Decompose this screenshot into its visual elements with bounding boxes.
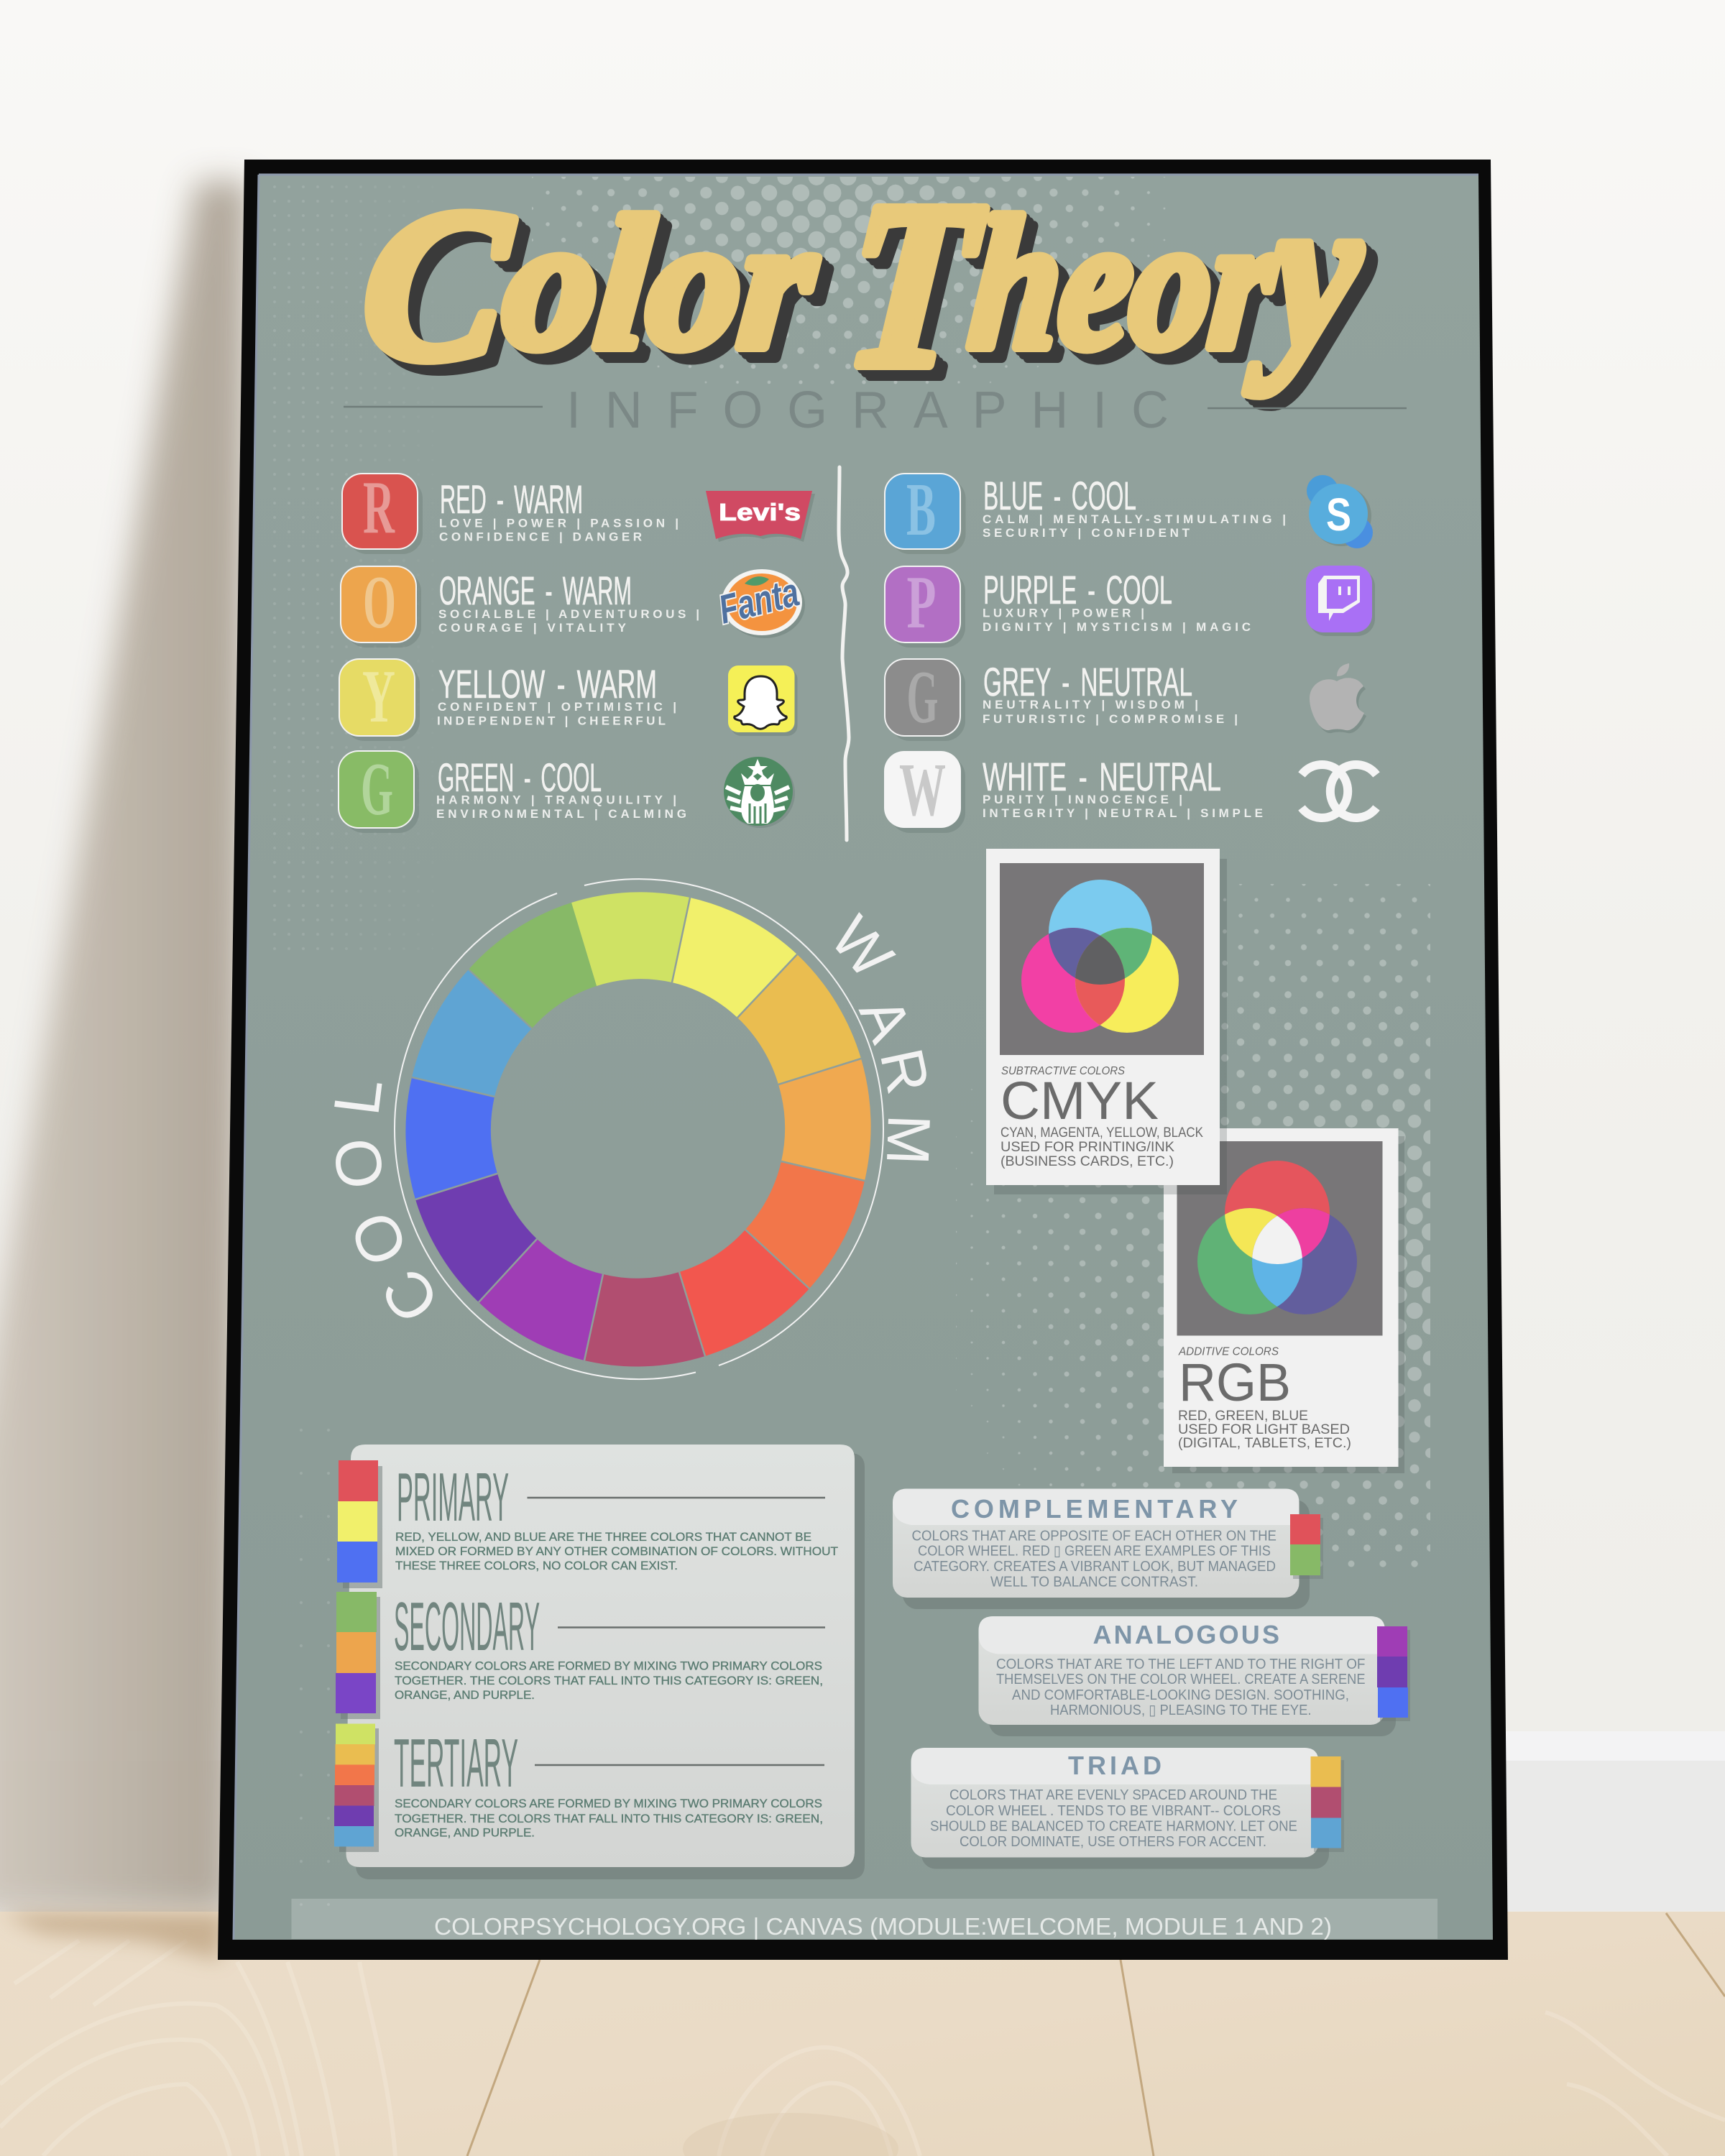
color row: green: G <box>361 747 393 831</box>
baseboard right <box>1502 1731 1725 1911</box>
logo: twitch <box>1306 566 1375 636</box>
logo: levi's <box>706 491 815 542</box>
card: cmyk: (BUSINESS CARDS, ETC.) <box>1000 1154 1174 1169</box>
wedge: blue <box>405 1077 497 1199</box>
color row: white: PURITY | INNOCENCE | <box>983 793 1182 806</box>
text: secondary: ORANGE, AND PURPLE. <box>395 1689 535 1702</box>
color row: orange <box>341 560 699 648</box>
logo: skype: S <box>1326 489 1351 540</box>
color row: green: GREEN - COOL <box>438 755 602 800</box>
color row: purple: DIGNITY | MYSTICISM | MAGIC <box>983 620 1251 634</box>
color row: blue: SECURITY | CONFIDENT <box>983 526 1190 540</box>
card: cmyk: CYAN, MAGENTA, YELLOW, BLACK <box>1000 1125 1203 1141</box>
swatches: tertiary <box>334 1723 379 1852</box>
baseboard left <box>0 1731 230 1912</box>
label: cool: O <box>336 1201 423 1276</box>
color row: grey: G <box>907 655 939 739</box>
color row: grey: GREY - NEUTRAL <box>983 659 1192 704</box>
color row: yellow: INDEPENDENT | CHEERFUL <box>437 714 666 727</box>
logo: snapchat <box>728 665 798 736</box>
wedge: purple <box>479 1239 603 1360</box>
wedge: red-orange <box>745 1161 865 1289</box>
color row: green: HARMONY | TRANQUILITY | <box>436 793 676 806</box>
color row: green: ENVIRONMENTAL | CALMING <box>436 807 686 821</box>
wavy divider <box>839 467 849 840</box>
logo: levi's: Levi's <box>719 499 801 525</box>
panel: triad: SHOULD BE BALANCED TO CREATE HARMONY. LET ONE <box>930 1818 1297 1834</box>
color row: orange: SOCIALBLE | ADVENTUROUS | <box>438 607 699 621</box>
title: y <box>1243 149 1372 395</box>
panel: analogous: THEMSELVES ON THE COLOR WHEEL. CREATE A SERENE <box>996 1672 1366 1687</box>
card: rgb <box>1164 1128 1404 1473</box>
panel: analogous: COLORS THAT ARE TO THE LEFT AND TO THE RIGHT OF <box>996 1657 1366 1672</box>
color row: green <box>339 747 686 833</box>
text: secondary <box>395 1660 823 1702</box>
label: warm <box>818 903 943 1166</box>
color row: purple: P <box>907 560 936 644</box>
color row: purple <box>885 560 1251 648</box>
title: heor <box>963 178 1286 387</box>
wedge: yellow-green <box>571 892 690 986</box>
panel: analogous: ANALOGOUS <box>1092 1620 1279 1649</box>
panel: triad: COLOR WHEEL . TENDS TO BE VIBRANT-- COLORS <box>946 1803 1281 1819</box>
color row: blue: CALM | MENTALLY-STIMULATING | <box>983 512 1286 526</box>
panel: primary secondary tertiary: TERTIARY <box>394 1725 518 1802</box>
label: warm: W <box>818 903 906 990</box>
wedge: red <box>679 1230 809 1356</box>
color row: white: WHITE - NEUTRAL <box>983 754 1221 799</box>
text: tertiary: TOGETHER. THE COLORS THAT FALL INTO THIS CATEGORY IS: GREEN, <box>395 1812 823 1825</box>
card: rgb: USED FOR LIGHT BASED <box>1178 1422 1350 1437</box>
color row: red: RED - WARM <box>440 476 583 522</box>
label: cool: L <box>321 1074 397 1119</box>
color row: yellow: YELLOW - WARM <box>438 661 657 706</box>
color row: red: LOVE | POWER | PASSION | <box>439 516 678 530</box>
label: warm: A <box>847 987 924 1051</box>
logo: chanel <box>1302 765 1376 818</box>
text: primary: THESE THREE COLORS, NO COLOR CAN EXIST. <box>395 1560 678 1572</box>
color row: blue: B <box>906 467 936 551</box>
color row: white <box>884 747 1263 833</box>
swatches: primary <box>337 1460 382 1588</box>
text: primary: MIXED OR FORMED BY ANY OTHER COMBINATION OF COLORS. WITHOUT <box>395 1545 838 1558</box>
subtitle: infographic: INFOGRAPHIC <box>566 382 1169 439</box>
logo: fanta <box>714 568 805 638</box>
color row: yellow <box>339 654 676 741</box>
wedge: green <box>469 903 597 1028</box>
color row: grey: FUTURISTIC | COMPROMISE | <box>983 712 1238 726</box>
panel: complementary <box>893 1489 1323 1609</box>
panel: primary secondary tertiary <box>334 1445 865 1879</box>
panel: complementary: WELL TO BALANCE CONTRAST. <box>990 1574 1198 1590</box>
swatches: complementary <box>1290 1514 1323 1579</box>
title <box>354 149 1372 416</box>
color row: purple: LUXURY | POWER | <box>983 607 1144 619</box>
wedge: magenta-red <box>584 1272 705 1366</box>
color row: blue <box>885 467 1286 554</box>
color row: blue: BLUE - COOL <box>983 473 1136 518</box>
color row: white: INTEGRITY | NEUTRAL | SIMPLE <box>983 806 1263 820</box>
text: tertiary: SECONDARY COLORS ARE FORMED BY MIXING TWO PRIMARY COLORS <box>395 1797 822 1810</box>
card: cmyk: SUBTRACTIVE COLORS <box>1001 1065 1125 1077</box>
color row: white: W <box>899 747 946 831</box>
wedge: orange <box>778 1059 871 1181</box>
wall shadow <box>0 181 248 1912</box>
card: cmyk: CMYK <box>1000 1071 1159 1130</box>
text: tertiary <box>395 1797 823 1840</box>
panel: analogous: HARMONIOUS, ▯ PLEASING TO THE EYE. <box>1050 1703 1311 1718</box>
text: primary <box>395 1531 838 1572</box>
footer band: COLORPSYCHOLOGY.ORG | CANVAS (MODULE:WELCOME, MODULE 1 AND 2) <box>434 1913 1332 1940</box>
swatches: analogous <box>1377 1626 1410 1721</box>
color row: grey: NEUTRALITY | WISDOM | <box>983 698 1198 711</box>
poster background <box>234 175 1493 1940</box>
card: rgb: (DIGITAL, TABLETS, ETC.) <box>1178 1436 1351 1451</box>
color row: yellow: Y <box>362 654 395 738</box>
card: cmyk: USED FOR PRINTING/INK <box>1000 1140 1174 1155</box>
color row: orange: O <box>363 560 396 644</box>
logo: fanta: Fanta <box>714 568 804 632</box>
text: primary: RED, YELLOW, AND BLUE ARE THE THREE COLORS THAT CANNOT BE <box>395 1531 811 1544</box>
panel: complementary: CATEGORY. CREATES A VIBRANT LOOK, BUT MANAGED <box>914 1559 1276 1575</box>
card: rgb: RED, GREEN, BLUE <box>1178 1409 1308 1424</box>
label: cool: O <box>321 1134 398 1193</box>
title: C <box>354 166 520 405</box>
logo: apple <box>1310 663 1366 733</box>
label: cool: C <box>368 1256 454 1336</box>
color row: orange: ORANGE - WARM <box>439 568 632 613</box>
wedge: light blue <box>412 969 532 1097</box>
color row: purple: PURPLE - COOL <box>983 567 1172 612</box>
color row: orange: COURAGE | VITALITY <box>438 621 627 635</box>
panel: analogous: AND COMFORTABLE-LOOKING DESIGN. SOOTHING, <box>1012 1687 1349 1703</box>
poster frame <box>218 160 1508 1960</box>
label: cool <box>321 1074 454 1336</box>
logo: starbucks <box>724 757 795 828</box>
card: cmyk <box>986 849 1227 1194</box>
card: rgb: ADDITIVE COLORS <box>1178 1345 1279 1358</box>
panel: primary secondary tertiary: PRIMARY <box>397 1459 509 1536</box>
title: T <box>838 153 993 416</box>
panel: analogous <box>979 1616 1410 1736</box>
panel: primary secondary tertiary: SECONDARY <box>394 1588 540 1665</box>
wood floor <box>0 1912 1725 2156</box>
color row: red: CONFIDENCE | DANGER <box>439 530 642 543</box>
rgb venn diagram <box>1197 1161 1357 1314</box>
swatches: secondary <box>336 1592 380 1719</box>
panel: triad: COLOR DOMINATE, USE OTHERS FOR ACCENT. <box>960 1834 1266 1850</box>
color row: red <box>342 465 678 554</box>
color row: grey <box>885 655 1238 741</box>
color wheel <box>395 879 883 1379</box>
panel: triad <box>911 1748 1344 1869</box>
panel: complementary: COMPLEMENTARY <box>951 1494 1238 1524</box>
outer arcs <box>395 879 883 1379</box>
panel: triad: TRIAD <box>1068 1751 1162 1780</box>
logo: skype <box>1307 475 1373 548</box>
footer band <box>292 1899 1438 1940</box>
wedge: violet <box>415 1174 537 1302</box>
wedge: yellow <box>672 898 797 1018</box>
panel: triad: COLORS THAT ARE EVENLY SPACED AROUND THE <box>949 1787 1277 1803</box>
panel: complementary: COLOR WHEEL. RED ▯ GREEN ARE EXAMPLES OF THIS <box>918 1544 1271 1560</box>
text: secondary: TOGETHER. THE COLORS THAT FALL INTO THIS CATEGORY IS: GREEN, <box>395 1674 823 1687</box>
text: secondary: SECONDARY COLORS ARE FORMED BY MIXING TWO PRIMARY COLORS <box>395 1660 822 1673</box>
wedge: yellow-orange <box>737 954 861 1084</box>
color row: yellow: CONFIDENT | OPTIMISTIC | <box>438 700 676 714</box>
label: warm: R <box>868 1043 942 1100</box>
color row: red: R <box>363 465 395 549</box>
swatches: triad <box>1311 1756 1344 1852</box>
cmyk venn diagram <box>1021 880 1179 1033</box>
label: warm: M <box>874 1113 943 1166</box>
title: olor <box>497 178 826 387</box>
panel: complementary: COLORS THAT ARE OPPOSITE OF EACH OTHER ON THE <box>911 1528 1276 1544</box>
text: tertiary: ORANGE, AND PURPLE. <box>395 1827 535 1840</box>
card: rgb: RGB <box>1179 1353 1291 1412</box>
